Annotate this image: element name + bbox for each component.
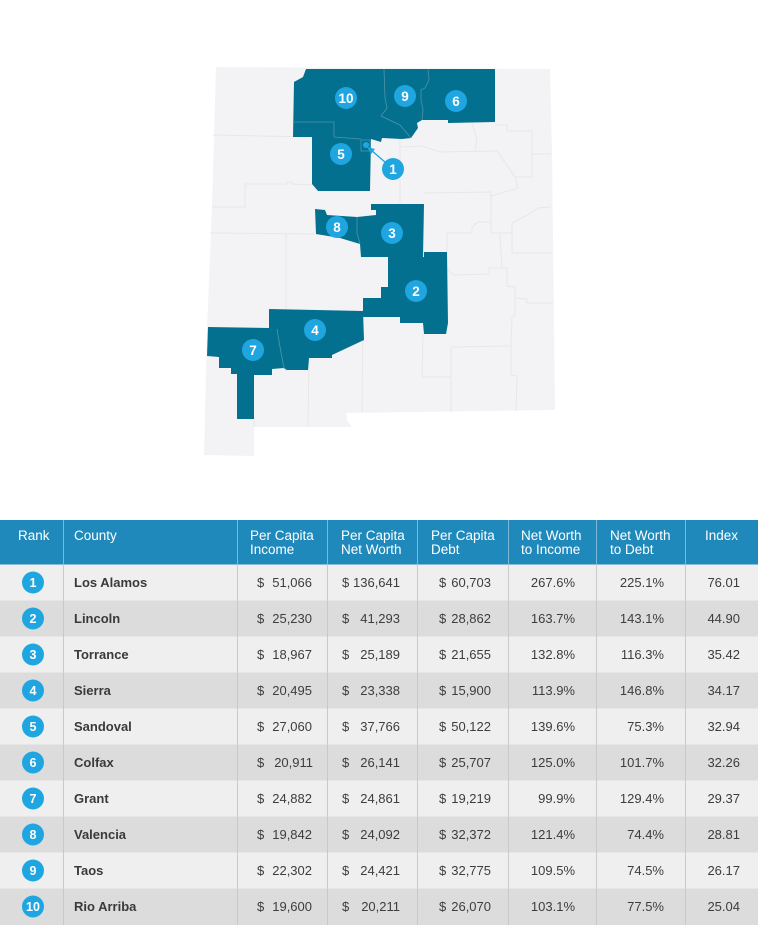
row 4: Sierra xyxy=(22,680,740,702)
row 3: Torrance: $ xyxy=(257,647,265,662)
row 9: Taos: 22,302 xyxy=(272,863,312,878)
row 7: Grant: 129.4% xyxy=(620,791,664,806)
row 6: Colfax: 125.0% xyxy=(531,755,575,770)
row 2: Lincoln: 163.7% xyxy=(531,611,575,626)
row 9: Taos: 9 xyxy=(30,864,37,878)
map badge 6 xyxy=(445,90,467,112)
row 3: Torrance xyxy=(22,644,740,666)
highlighted counties: Torrance and Valencia xyxy=(315,204,424,257)
table header: Rank xyxy=(18,528,50,543)
row 3: Torrance: $ xyxy=(342,647,350,662)
map of New Mexico counties xyxy=(204,67,555,456)
row 4: Sierra: Sierra xyxy=(74,683,112,698)
row 6: Colfax: $ xyxy=(342,755,350,770)
row 7: Grant: 24,882 xyxy=(272,791,312,806)
row 1: Los Alamos: 267.6% xyxy=(531,575,575,590)
row 7: Grant: 19,219 xyxy=(451,791,491,806)
row 2: Lincoln xyxy=(22,608,740,630)
row 8: Valencia: 32,372 xyxy=(451,827,491,842)
row 2: Lincoln: 2 xyxy=(30,612,37,626)
table header: Index xyxy=(705,528,738,543)
row 4: Sierra: 34.17 xyxy=(707,683,740,698)
callout: Los Alamos marker and arrow xyxy=(363,142,393,169)
table header: Per Capita xyxy=(341,528,405,543)
row 7: Grant: $ xyxy=(342,791,350,806)
row 6: Colfax: 26,141 xyxy=(360,755,400,770)
row 10: Rio Arriba: 19,600 xyxy=(272,899,312,914)
map badge 1: 1 xyxy=(389,162,397,177)
map badge 8: 8 xyxy=(333,220,341,235)
row 5: Sandoval: 5 xyxy=(30,720,37,734)
row 2: Lincoln: 28,862 xyxy=(451,611,491,626)
map badge 7: 7 xyxy=(249,343,257,358)
row 10: Rio Arriba: Rio Arriba xyxy=(74,899,137,914)
row 10: Rio Arriba: $ xyxy=(439,899,447,914)
row 10: Rio Arriba: $ xyxy=(342,899,350,914)
row 2: Lincoln: $ xyxy=(439,611,447,626)
map badge 3 xyxy=(381,222,403,244)
state outline xyxy=(204,67,555,456)
row 9: Taos: $ xyxy=(439,863,447,878)
table header: Income xyxy=(250,542,294,557)
row 2: Lincoln: $ xyxy=(257,611,265,626)
row 3: Torrance: $ xyxy=(439,647,447,662)
row 3: Torrance: 25,189 xyxy=(360,647,400,662)
row 6: Colfax: 20,911 xyxy=(274,755,313,770)
row 8: Valencia xyxy=(22,824,740,846)
row 6: Colfax: $ xyxy=(257,755,265,770)
row 3: Torrance: 21,655 xyxy=(451,647,491,662)
map badge 9: 9 xyxy=(401,89,409,104)
row 3: Torrance: 132.8% xyxy=(531,647,575,662)
row 9: Taos: $ xyxy=(257,863,265,878)
row 9: Taos: 109.5% xyxy=(531,863,575,878)
map badge 10: 10 xyxy=(338,91,354,106)
row 6: Colfax xyxy=(22,752,740,774)
row 7: Grant xyxy=(22,788,740,810)
row 2: Lincoln: 143.1% xyxy=(620,611,664,626)
row 2: Lincoln: $ xyxy=(342,611,350,626)
row 7: Grant: 24,861 xyxy=(360,791,400,806)
map badge 6: 6 xyxy=(452,94,460,109)
row 1: Los Alamos: 1 xyxy=(30,576,37,590)
row 5: Sandoval: 139.6% xyxy=(531,719,575,734)
row 2: Lincoln: Lincoln xyxy=(74,611,120,626)
row 1: Los Alamos: $ xyxy=(439,575,447,590)
table header: Net Worth xyxy=(610,528,671,543)
row 10: Rio Arriba: 25.04 xyxy=(707,899,740,914)
row 8: Valencia: $ xyxy=(439,827,447,842)
row 1: Los Alamos: 225.1% xyxy=(620,575,664,590)
row 1: Los Alamos: Los Alamos xyxy=(74,575,147,590)
row 10: Rio Arriba: 103.1% xyxy=(531,899,575,914)
row 6: Colfax: $ xyxy=(439,755,447,770)
row 5: Sandoval: $ xyxy=(257,719,265,734)
row 9: Taos xyxy=(22,860,740,882)
county boundaries xyxy=(210,123,553,427)
map badge 4 xyxy=(304,319,326,341)
row 9: Taos: 32,775 xyxy=(451,863,491,878)
map badge 8 xyxy=(326,216,348,238)
table header: to Income xyxy=(521,542,580,557)
row 4: Sierra: 113.9% xyxy=(532,683,575,698)
row 8: Valencia: $ xyxy=(342,827,350,842)
map badge 5: 5 xyxy=(337,147,345,162)
row 5: Sandoval: 32.94 xyxy=(707,719,740,734)
row 2: Lincoln: 44.90 xyxy=(707,611,740,626)
row 6: Colfax: 32.26 xyxy=(707,755,740,770)
row 6: Colfax: 6 xyxy=(30,756,37,770)
row 7: Grant: 7 xyxy=(30,792,37,806)
table header: Per Capita xyxy=(431,528,495,543)
row 10: Rio Arriba: 20,211 xyxy=(361,899,400,914)
row 7: Grant: $ xyxy=(439,791,447,806)
table header: Net Worth xyxy=(521,528,582,543)
row 2: Lincoln: 25,230 xyxy=(272,611,312,626)
row 8: Valencia: 74.4% xyxy=(627,827,664,842)
row 2: Lincoln: 41,293 xyxy=(360,611,400,626)
row 5: Sandoval xyxy=(22,716,740,738)
row 1: Los Alamos: $ xyxy=(257,575,265,590)
row 9: Taos: Taos xyxy=(74,863,103,878)
row 10: Rio Arriba xyxy=(22,896,740,918)
row 4: Sierra: 15,900 xyxy=(451,683,491,698)
row 1: Los Alamos: 60,703 xyxy=(451,575,491,590)
row 5: Sandoval: $ xyxy=(439,719,447,734)
row 8: Valencia: Valencia xyxy=(74,827,127,842)
row 7: Grant: $ xyxy=(257,791,265,806)
map badge 4: 4 xyxy=(311,323,319,338)
row 4: Sierra: 23,338 xyxy=(360,683,400,698)
row 7: Grant: 99.9% xyxy=(538,791,575,806)
map badge 9 xyxy=(394,85,416,107)
table header: Per Capita xyxy=(250,528,314,543)
table header: Net Worth xyxy=(341,542,402,557)
map badge 2 xyxy=(405,280,427,302)
highlighted counties: Rio Arriba, Taos, Colfax, Sandoval, Los Alamos xyxy=(293,69,495,191)
row 1: Los Alamos: 76.01 xyxy=(707,575,740,590)
row 8: Valencia: 8 xyxy=(30,828,37,842)
row stripes xyxy=(0,564,758,925)
row 4: Sierra: $ xyxy=(342,683,350,698)
row 5: Sandoval: 37,766 xyxy=(360,719,400,734)
ranking table xyxy=(0,520,758,925)
map badge 1 xyxy=(382,158,404,180)
highlighted county: Lincoln xyxy=(363,252,448,334)
row 6: Colfax: Colfax xyxy=(74,755,114,770)
row 8: Valencia: 121.4% xyxy=(531,827,575,842)
row 10: Rio Arriba: 10 xyxy=(26,900,40,914)
row 1: Los Alamos: 136,641 xyxy=(353,575,400,590)
map badge 10 xyxy=(335,87,357,109)
row 3: Torrance: 35.42 xyxy=(707,647,740,662)
row 10: Rio Arriba: 26,070 xyxy=(451,899,491,914)
map badge 5 xyxy=(330,143,352,165)
row 7: Grant: 29.37 xyxy=(707,791,740,806)
row 5: Sandoval: Sandoval xyxy=(74,719,132,734)
row 4: Sierra: $ xyxy=(439,683,447,698)
table header: Debt xyxy=(431,542,460,557)
row 9: Taos: 24,421 xyxy=(360,863,400,878)
row 3: Torrance: 3 xyxy=(30,648,37,662)
row 8: Valencia: 19,842 xyxy=(272,827,312,842)
row 9: Taos: 26.17 xyxy=(707,863,740,878)
row 5: Sandoval: 75.3% xyxy=(627,719,664,734)
row 1: Los Alamos: $ xyxy=(342,575,350,590)
row 1: Los Alamos xyxy=(22,572,740,594)
row 4: Sierra: $ xyxy=(257,683,265,698)
row 6: Colfax: 101.7% xyxy=(620,755,664,770)
highlighted counties: Sierra and Grant xyxy=(207,309,364,419)
row 9: Taos: $ xyxy=(342,863,350,878)
row 5: Sandoval: $ xyxy=(342,719,350,734)
row 3: Torrance: 116.3% xyxy=(621,647,664,662)
map badge 2: 2 xyxy=(412,284,420,299)
row 9: Taos: 74.5% xyxy=(627,863,664,878)
row 7: Grant: Grant xyxy=(74,791,109,806)
row 5: Sandoval: 50,122 xyxy=(451,719,491,734)
row 8: Valencia: $ xyxy=(257,827,265,842)
row 4: Sierra: 146.8% xyxy=(620,683,664,698)
map badge 7 xyxy=(242,339,264,361)
row 3: Torrance: Torrance xyxy=(74,647,129,662)
row 4: Sierra: 20,495 xyxy=(272,683,312,698)
row 10: Rio Arriba: 77.5% xyxy=(627,899,664,914)
row 6: Colfax: 25,707 xyxy=(451,755,491,770)
table header: County xyxy=(74,528,117,543)
row 3: Torrance: 18,967 xyxy=(272,647,312,662)
row 10: Rio Arriba: $ xyxy=(257,899,265,914)
row 4: Sierra: 4 xyxy=(30,684,37,698)
map badge 3: 3 xyxy=(388,226,396,241)
table header: to Debt xyxy=(610,542,654,557)
row 8: Valencia: 24,092 xyxy=(360,827,400,842)
row 8: Valencia: 28.81 xyxy=(707,827,740,842)
table header xyxy=(0,520,758,564)
row 1: Los Alamos: 51,066 xyxy=(272,575,312,590)
row 5: Sandoval: 27,060 xyxy=(272,719,312,734)
